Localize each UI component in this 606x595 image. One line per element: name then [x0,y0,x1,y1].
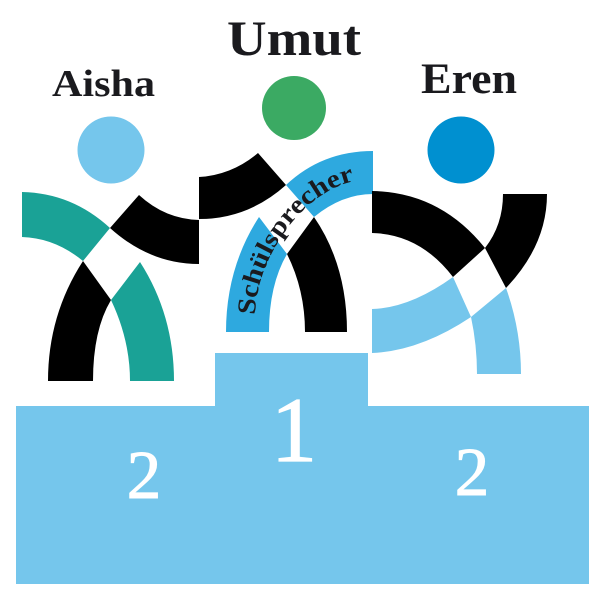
left arm [199,153,286,219]
left leg [226,217,287,332]
figure: Eren [372,116,547,374]
right arm [485,194,547,288]
right leg [111,262,174,381]
head [78,116,144,184]
figure: Aisha [22,116,199,381]
head [262,76,326,140]
number 2 right: 2 [455,434,489,510]
head [428,116,494,184]
sash label: Schülsprecher [238,169,352,314]
left arm [22,192,110,261]
number 2 left: 2 [127,437,161,513]
number 1: 1 [271,379,317,481]
name: Umut: Umut [227,10,361,66]
podium [16,353,589,584]
figure: Umut [199,76,373,332]
right arm [286,151,373,217]
right leg [287,217,347,332]
left leg [48,261,111,381]
left arm [372,191,485,277]
name: Aisha: Aisha [52,63,155,105]
right arm [110,195,199,264]
lower arm [372,277,471,353]
leg [471,288,521,374]
name: Eren: Eren [421,56,517,103]
